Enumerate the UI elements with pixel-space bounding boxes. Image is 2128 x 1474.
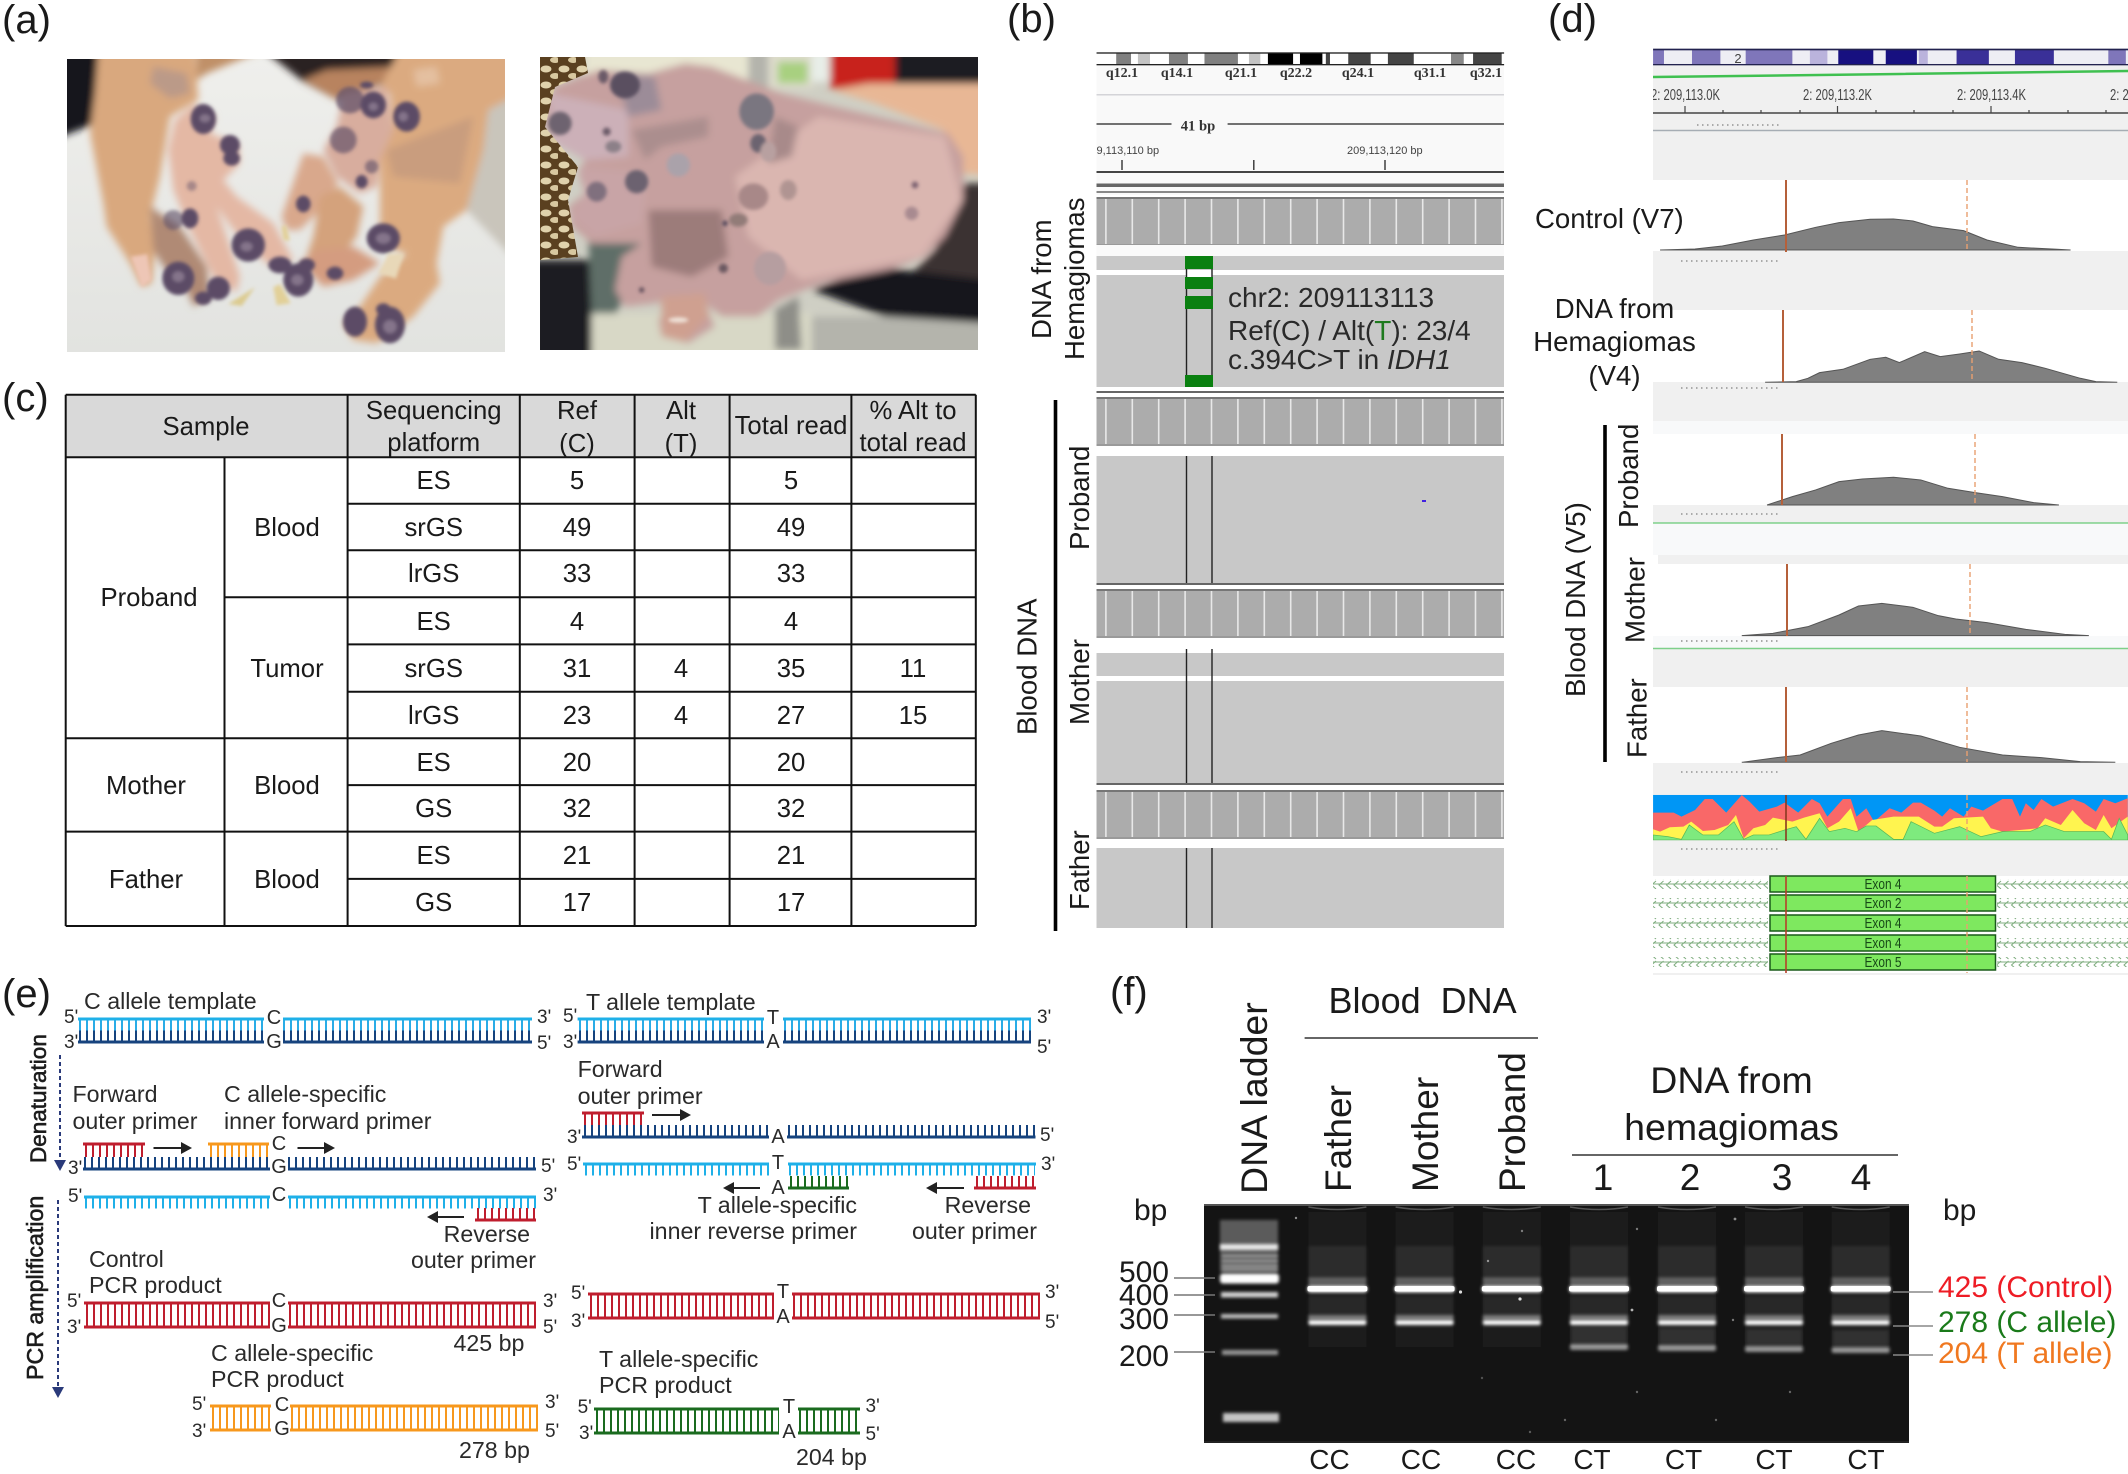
C allele-specific PCR product: 5' xyxy=(545,1421,559,1442)
label: DNA from Hemagiomas (V4): Hemagiomas xyxy=(1533,326,1696,357)
T allele upper strand with reverse primers: inner reverse primer xyxy=(650,1218,857,1244)
coverage plots xyxy=(1660,219,2117,505)
T allele lower strand with forward primer: Forward xyxy=(578,1056,663,1082)
panel a: photo of both hands with nodules xyxy=(57,50,513,352)
C allele-specific PCR product: 3' xyxy=(192,1421,206,1442)
T allele template: A xyxy=(766,1031,780,1053)
exon boxes xyxy=(1770,876,1996,971)
table header: % Alt to xyxy=(869,397,957,425)
control PCR product, T allele: 3' xyxy=(1045,1282,1059,1303)
T allele-specific PCR product: 3' xyxy=(579,1423,593,1444)
T allele lower strand with forward primer xyxy=(567,1056,1054,1148)
table rows: 31 xyxy=(563,655,591,683)
coverage track: mother xyxy=(1096,589,1504,638)
C allele-specific PCR product: 278 bp xyxy=(459,1437,530,1463)
coverage: control xyxy=(1660,219,2071,250)
table header: platform xyxy=(387,429,480,457)
left size labels: 200 xyxy=(1119,1340,1169,1373)
table rows: 4 xyxy=(784,608,798,636)
header: Blood DNA: Blood DNA xyxy=(1329,980,1517,1021)
T allele upper strand with reverse primers: outer primer xyxy=(912,1218,1037,1244)
C allele upper strand with reverse primer: Reverse xyxy=(444,1221,530,1247)
alignment track: proband xyxy=(1096,456,1504,583)
T allele lower strand with forward primer: 3' xyxy=(567,1127,581,1148)
sample lanes xyxy=(1305,1206,1894,1329)
T allele template: T xyxy=(767,1007,779,1029)
panel label (e): (e) xyxy=(2,972,51,1016)
panel b: IGV read alignment xyxy=(1096,52,1504,928)
panel d: genome browser coverage tracks xyxy=(1651,49,2128,975)
C allele lower strand with forward primers: G xyxy=(271,1156,287,1178)
gel speckles xyxy=(1295,1217,1791,1433)
C allele-specific PCR product xyxy=(192,1340,559,1463)
control PCR product, C allele: Control xyxy=(89,1246,164,1272)
C allele-specific PCR product: PCR product xyxy=(211,1366,344,1392)
left size labels: 300 xyxy=(1119,1303,1169,1336)
table rows: ES xyxy=(417,749,451,777)
C allele template xyxy=(64,988,551,1054)
table header: Sequencing xyxy=(366,397,502,425)
coverage: mother xyxy=(1742,603,2089,636)
table rows: 4 xyxy=(570,608,584,636)
T allele template: 5' xyxy=(563,1006,577,1027)
table header: Ref xyxy=(557,397,598,425)
axis labels and ticks: 2: 209,113.4K xyxy=(1957,87,2026,104)
table rows: 5 xyxy=(570,467,584,495)
panel f: gel electrophoresis headers xyxy=(1233,980,1898,1198)
table rows: 49 xyxy=(777,514,805,542)
cytoband labels: q24.1 xyxy=(1342,66,1374,81)
gel image xyxy=(1204,1204,1909,1443)
header: DNA from hemagiomas: DNA from xyxy=(1650,1059,1813,1101)
right amplicon labels: 425 (Control) xyxy=(1938,1271,2113,1304)
control PCR product, C allele: 3' xyxy=(67,1317,81,1338)
alignment track: father xyxy=(1096,848,1504,928)
table rows: 33 xyxy=(777,560,805,588)
C allele-specific PCR product: C xyxy=(275,1394,289,1416)
label: DNA from Hemagiomas (V4) xyxy=(1533,293,1696,391)
table rows: 11 xyxy=(900,655,926,683)
control PCR product, T allele: 3' xyxy=(571,1311,585,1332)
lane numbers: 1 xyxy=(1593,1157,1613,1198)
coverage: proband xyxy=(1767,477,2059,505)
C allele-specific PCR product: 3' xyxy=(545,1392,559,1413)
sample and tissue labels: Blood xyxy=(254,772,320,800)
control PCR product, C allele: C xyxy=(272,1290,286,1312)
control PCR product, T allele: A xyxy=(776,1306,790,1328)
C allele template: 3' xyxy=(537,1007,551,1028)
table header: (T) xyxy=(665,430,697,458)
table header: total read xyxy=(859,429,967,457)
label: Father: Father xyxy=(1064,830,1095,910)
control PCR product, T allele xyxy=(571,1281,1059,1333)
exon boxes: Exon 5 xyxy=(1864,954,1902,971)
genotype labels xyxy=(1309,1444,1885,1474)
table rows: ES xyxy=(417,608,451,636)
C allele lower strand with forward primers: 3' xyxy=(68,1158,82,1179)
chromosome ideogram xyxy=(1097,52,1504,65)
gene model introns xyxy=(1653,879,2128,967)
table rows: 17 xyxy=(563,889,591,917)
green range line xyxy=(1653,71,2128,77)
control PCR product, C allele: PCR product xyxy=(89,1272,222,1298)
C allele-specific PCR product: C allele-specific xyxy=(211,1340,373,1366)
header: DNA ladder: DNA ladder xyxy=(1233,1002,1275,1194)
control PCR product, C allele: 425 bp xyxy=(454,1330,524,1356)
C allele-specific PCR product: 5' xyxy=(192,1394,206,1415)
T allele lower strand with forward primer: outer primer xyxy=(578,1083,703,1109)
primer labels, C allele: C allele-specific xyxy=(224,1081,386,1107)
table rows: 15 xyxy=(899,702,927,730)
panel label (c): (c) xyxy=(2,376,49,420)
table rows: 32 xyxy=(563,795,591,823)
control PCR product, C allele: 5' xyxy=(67,1291,81,1312)
green separators xyxy=(1653,523,2128,648)
chromosome number: 2 xyxy=(1734,51,1742,66)
table rows: 27 xyxy=(777,702,805,730)
label: Proband: Proband xyxy=(1064,446,1095,550)
header: DNA from hemagiomas xyxy=(1572,1059,1898,1155)
table rows: 21 xyxy=(777,842,805,870)
arrow: PCR amplification xyxy=(52,1200,64,1398)
label: Proband: Proband xyxy=(1613,424,1644,528)
table rows: 20 xyxy=(563,749,591,777)
cytoband labels: q22.2 xyxy=(1280,66,1312,81)
genomic coordinates ruler xyxy=(1096,145,1504,193)
C allele lower strand with forward primers xyxy=(68,1133,555,1179)
table rows: lrGS xyxy=(408,560,459,588)
left size labels: 500 xyxy=(1119,1256,1169,1289)
coverage track: hemangiomas xyxy=(1096,197,1504,246)
axis labels and ticks: 2: 209,113.0K xyxy=(1651,87,1720,104)
panel a: photo of dorsal hand with nodules xyxy=(532,50,988,360)
exon boxes: Exon 4 xyxy=(1864,876,1902,893)
table rows: 23 xyxy=(563,702,591,730)
exon boxes: Exon 2 xyxy=(1864,895,1902,912)
control PCR product, C allele: 5' xyxy=(543,1317,557,1338)
T allele-specific PCR product: PCR product xyxy=(599,1372,732,1398)
sample and tissue labels: Father xyxy=(109,866,184,894)
label: DNA from Hemagiomas: Hemagiomas xyxy=(1059,197,1090,360)
label: Blood DNA with bracket: Blood DNA xyxy=(1012,598,1042,735)
cytoband labels: q14.1 xyxy=(1161,66,1193,81)
cytoband labels: q31.1 xyxy=(1414,66,1446,81)
label: DNA from Hemagiomas (V4): DNA from xyxy=(1555,293,1674,324)
annotation: variant position: chr2: 209113113 xyxy=(1228,282,1434,313)
table rows: srGS xyxy=(404,655,463,683)
C allele template: G xyxy=(266,1031,282,1053)
lane label: Father: Father xyxy=(1318,1085,1359,1192)
table header: Alt xyxy=(666,397,696,425)
T allele-specific PCR product: 5' xyxy=(578,1397,592,1418)
41 bp scale: 41 bp xyxy=(1181,118,1215,134)
cytoband labels: q12.1 xyxy=(1106,66,1138,81)
table rows: 32 xyxy=(777,795,805,823)
lane label: Proband: Proband xyxy=(1492,1052,1533,1192)
C allele template: 5' xyxy=(537,1033,551,1054)
stacked composition plot xyxy=(1653,795,2128,840)
control PCR product, C allele xyxy=(67,1246,557,1356)
primer labels, C allele: inner forward primer xyxy=(224,1108,432,1134)
table rows: 4 xyxy=(674,702,688,730)
cytoband labels xyxy=(1106,66,1502,81)
table rows: 5 xyxy=(784,467,798,495)
table rows: 49 xyxy=(563,514,591,542)
control PCR product, T allele: T xyxy=(777,1281,789,1303)
T allele upper strand with reverse primers: T xyxy=(772,1152,784,1174)
right amplicon labels: 278 (C allele) xyxy=(1938,1306,2116,1339)
T allele-specific PCR product xyxy=(578,1346,880,1470)
table rows: ES xyxy=(417,467,451,495)
arrow: denaturation xyxy=(54,1055,66,1171)
C allele template: 5' xyxy=(64,1007,78,1028)
genomic coordinates ruler: 9,113,110 bp xyxy=(1096,145,1159,157)
T allele-specific PCR product: 204 bp xyxy=(796,1444,867,1470)
sample and tissue labels: Proband xyxy=(100,584,198,612)
C allele upper strand with reverse primer: outer primer xyxy=(411,1247,536,1273)
sample and tissue labels: Mother xyxy=(106,772,186,800)
label: DNA from Hemagiomas (V4): (V4) xyxy=(1588,360,1641,391)
label: Blood DNA (V5) with bracket xyxy=(1560,425,1607,762)
C allele template: C xyxy=(267,1007,281,1029)
T allele lower strand with forward primer: 5' xyxy=(1040,1125,1054,1146)
lane label: Mother: Mother xyxy=(1405,1077,1446,1192)
table rows: GS xyxy=(415,795,452,823)
T allele upper strand with reverse primers: Reverse xyxy=(945,1192,1031,1218)
panel label (f): (f) xyxy=(1110,970,1148,1014)
sample and tissue labels: Blood xyxy=(254,866,320,894)
annotation: variant position: Ref(C) / Alt(T): 23/4 xyxy=(1228,315,1471,346)
C allele upper strand with reverse primer: C xyxy=(272,1184,286,1206)
coverage: father xyxy=(1742,731,2115,762)
panel c: sequencing read table xyxy=(66,395,976,926)
table rows: 35 xyxy=(777,655,805,683)
table header: Total read xyxy=(735,412,847,440)
label: Mother: Mother xyxy=(1620,557,1650,643)
chromosome ideogram xyxy=(1653,49,2128,65)
table header xyxy=(162,397,967,458)
control PCR product, C allele: G xyxy=(271,1315,287,1337)
left size labels xyxy=(1119,1194,1215,1373)
control PCR product, T allele: 5' xyxy=(571,1283,585,1304)
table grid xyxy=(66,395,976,926)
label: Father: Father xyxy=(1622,678,1652,758)
table rows xyxy=(404,467,927,917)
dotted read labels xyxy=(1681,125,1781,849)
T allele template: 3' xyxy=(563,1032,577,1053)
T allele template: 5' xyxy=(1037,1037,1051,1058)
lane numbers: 3 xyxy=(1772,1157,1792,1198)
alignment track: mother xyxy=(1096,649,1504,783)
table rows: 17 xyxy=(777,889,805,917)
table rows: 20 xyxy=(777,749,805,777)
label: Blood DNA with bracket xyxy=(1012,400,1057,931)
C allele lower strand with forward primers: C xyxy=(272,1133,286,1155)
C allele template: C allele template xyxy=(84,988,257,1014)
T allele bands xyxy=(1570,1327,1890,1353)
exon boxes: Exon 4 xyxy=(1864,935,1902,952)
control PCR product, T allele: 5' xyxy=(1045,1312,1059,1333)
C allele lower strand with forward primers: 5' xyxy=(541,1156,555,1177)
alignment track: hemangiomas xyxy=(1096,245,1504,387)
sample and tissue labels xyxy=(100,514,324,894)
C allele template: 3' xyxy=(64,1032,78,1053)
C allele upper strand with reverse primer: 3' xyxy=(543,1185,557,1206)
axis labels and ticks: 2: 209,113.2K xyxy=(1803,87,1872,104)
cytoband labels: q21.1 xyxy=(1225,66,1257,81)
table rows: ES xyxy=(417,842,451,870)
exon boxes: Exon 4 xyxy=(1864,915,1902,932)
T allele-specific PCR product: T xyxy=(783,1396,795,1418)
T allele-specific PCR product: T allele-specific xyxy=(599,1346,758,1372)
primer labels, C allele: outer primer xyxy=(72,1108,198,1134)
side label: Denaturation: Denaturation xyxy=(26,1034,51,1163)
right amplicon labels: bp xyxy=(1943,1194,1976,1227)
C allele-specific PCR product: G xyxy=(274,1418,290,1440)
cytoband labels: q32.1 xyxy=(1470,66,1502,81)
panel e: ARMS-PCR schematic xyxy=(22,988,1059,1470)
coverage track: proband xyxy=(1096,397,1504,446)
right amplicon labels: 204 (T allele) xyxy=(1938,1337,2113,1370)
position markers xyxy=(1782,180,1975,973)
label: Mother: Mother xyxy=(1064,639,1095,725)
table rows: lrGS xyxy=(408,702,459,730)
T allele upper strand with reverse primers: 3' xyxy=(1041,1154,1055,1175)
label: Blood DNA (V5) with bracket: Blood DNA (V5) xyxy=(1560,502,1591,697)
table rows: 4 xyxy=(674,655,688,683)
sample and tissue labels: Blood xyxy=(254,514,320,542)
genomic coordinates ruler: 209,113,120 bp xyxy=(1347,145,1423,157)
T allele upper strand with reverse primers: T allele-specific xyxy=(698,1192,857,1218)
lane numbers xyxy=(1593,1157,1871,1198)
T allele template: 3' xyxy=(1037,1007,1051,1028)
label: DNA from Hemagiomas: DNA from xyxy=(1026,219,1057,339)
coverage: hemangiomas xyxy=(1765,351,2117,382)
T allele template xyxy=(563,989,1051,1058)
header: DNA from hemagiomas: hemagiomas xyxy=(1624,1106,1839,1148)
T allele lower strand with forward primer: A xyxy=(771,1126,785,1148)
axis labels and ticks xyxy=(1651,87,2128,130)
control PCR product, C allele: 3' xyxy=(543,1291,557,1312)
T allele upper strand with reverse primers xyxy=(567,1152,1055,1244)
T allele-specific PCR product: 3' xyxy=(866,1396,880,1417)
label: Control (V7): Control (V7) xyxy=(1535,203,1684,234)
T allele upper strand with reverse primers: 5' xyxy=(567,1154,581,1175)
primer labels, C allele xyxy=(72,1081,432,1134)
C allele upper strand with reverse primer: 5' xyxy=(68,1186,82,1207)
T allele upper strand with reverse primers: A xyxy=(771,1177,785,1199)
lane numbers: 2 xyxy=(1680,1157,1700,1198)
DNA ladder bands xyxy=(1220,1220,1279,1422)
table rows: srGS xyxy=(404,514,463,542)
table rows: 21 xyxy=(563,842,591,870)
T allele-specific PCR product: 5' xyxy=(866,1424,880,1445)
sample and tissue labels: Tumor xyxy=(250,655,324,683)
table rows: 33 xyxy=(563,560,591,588)
left size labels: bp xyxy=(1134,1194,1167,1227)
label: DNA from Hemagiomas xyxy=(1026,197,1090,360)
C allele upper strand with reverse primer xyxy=(68,1184,557,1273)
coverage track: father xyxy=(1096,790,1504,839)
track backgrounds xyxy=(1653,65,2128,975)
table rows: GS xyxy=(415,889,452,917)
primer labels, C allele: Forward xyxy=(72,1081,158,1107)
table header: (C) xyxy=(559,430,595,458)
annotation: variant position xyxy=(1228,282,1471,375)
table header: Sample xyxy=(162,413,250,441)
side label: PCR amplification: PCR amplification xyxy=(22,1196,48,1380)
lane numbers: 4 xyxy=(1851,1157,1871,1198)
annotation: variant position: c.394C>T in IDH1 xyxy=(1228,344,1451,375)
T allele-specific PCR product: A xyxy=(782,1421,796,1443)
right amplicon labels xyxy=(1893,1194,2116,1370)
T allele template: T allele template xyxy=(586,989,756,1015)
left size labels: 400 xyxy=(1119,1279,1169,1312)
